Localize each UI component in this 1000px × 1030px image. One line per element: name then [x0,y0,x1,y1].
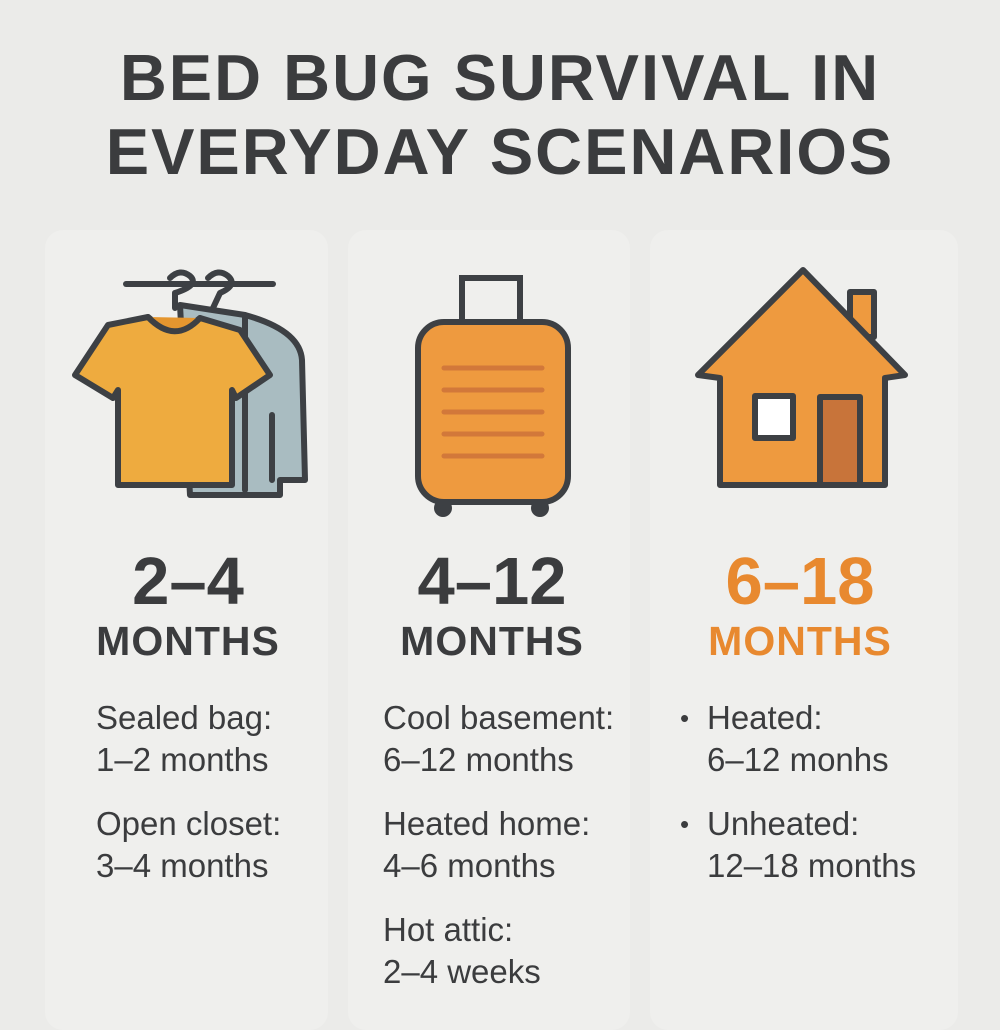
stat: house [708,544,892,664]
stat: suitcase [400,544,584,664]
title: BED BUG SURVIVAL IN [120,41,880,114]
panel: clothes [45,230,328,1030]
stat: clothes: MONTHS [96,618,280,664]
panel: suitcase [348,230,630,1030]
stat: house: MONTHS [708,618,892,664]
text: suitcase details: 6–12 months Heated home: [383,741,590,842]
text: house details [681,699,916,884]
text: suitcase details [383,699,614,990]
text: clothes details: 1–2 months Open closet: [96,741,281,842]
text: clothes details [96,699,281,884]
text: suitcase details: 4–6 months Hot attic: [383,847,555,948]
stat: suitcase: 4–12 [417,544,567,619]
stat: clothes [96,544,280,664]
text: house details: 6–12 monhs [707,741,889,778]
icon: suitcase [415,275,571,517]
text: house details: Heated: [707,699,823,736]
stat: clothes: 2–4 [132,544,244,619]
text: house details: Unheated: [707,805,859,842]
text: house details: 12–18 months [707,847,916,884]
stat: house: 6–18 [725,544,875,619]
title: EVERYDAY SCENARIOS [106,115,894,188]
icon: house [695,267,908,488]
panel: house [650,230,958,1030]
icon: clothes on hangers [72,270,308,498]
text: clothes details: 3–4 months [96,847,268,884]
text: clothes details: Sealed bag: [96,699,272,736]
text: suitcase details: Cool basement: [383,699,614,736]
title [106,41,894,188]
stat: suitcase: MONTHS [400,618,584,664]
text: suitcase details: 2–4 weeks [383,953,541,990]
